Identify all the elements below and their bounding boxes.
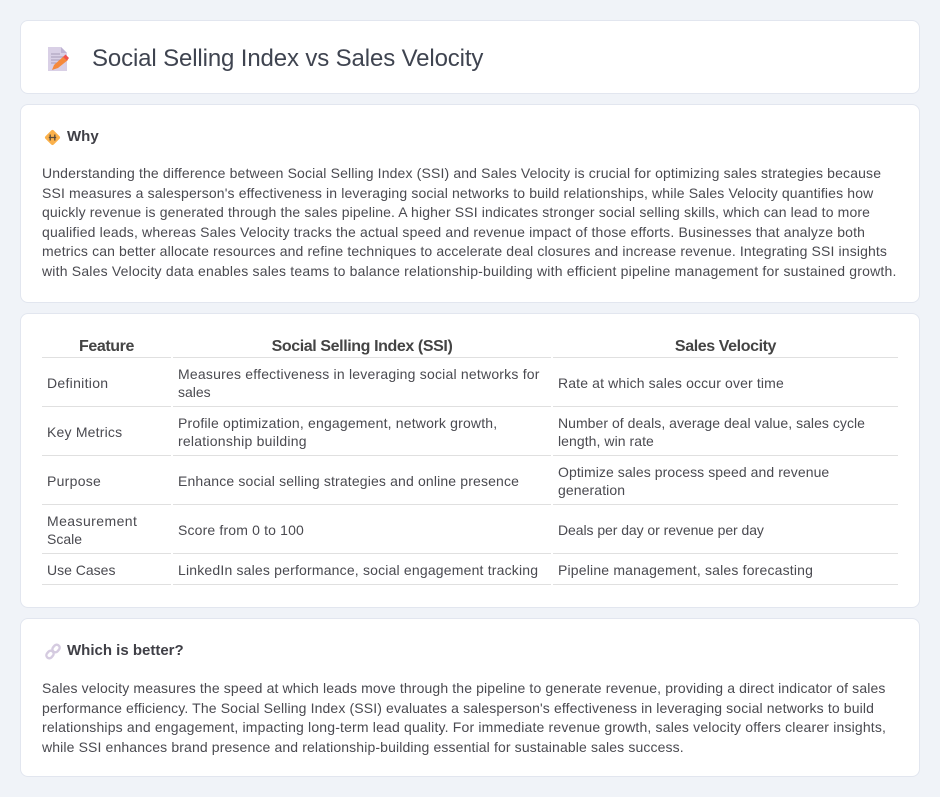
heading: why: Why [67, 128, 99, 145]
row: use cases: LinkedIn sales performance, social engagement tracking [178, 562, 538, 578]
table header: sales velocity: Sales Velocity [675, 338, 776, 355]
text block: why: with Sales Velocity data enables sales teams to balance relationship-building with efficient pipeline management for sustained growth. [42, 263, 897, 279]
text block: why: SSI measures a salesperson's effectiveness in leveraging social networks to build relationships, while Sales Velocity quantifies how [42, 185, 873, 201]
row: key metrics: Number of deals, average deal value, sales cycle [558, 414, 865, 430]
text block: why: metrics can better allocate resources and refine techniques to accelerate deal closures and increase revenue. Integrating SSI insights [42, 243, 887, 259]
row: key metrics: Key Metrics [47, 424, 122, 440]
row: purpose: Optimize sales process speed and revenue [558, 464, 829, 480]
icon: chain link [45, 644, 61, 660]
text block: which is better: performance efficiency. The Social Selling Index (SSI) evaluates a salesperson's effectiveness in leveraging social networks to build [42, 700, 874, 716]
row: definition: sales [178, 384, 211, 400]
text block: why: Understanding the difference between Social Selling Index (SSI) and Sales Velocity is crucial for optimizing sales strategies because [42, 165, 881, 181]
panel: why [20, 104, 920, 303]
table header: feature [42, 337, 171, 358]
row: key metrics: length, win rate [558, 432, 654, 448]
row: key metrics: relationship building [178, 432, 307, 448]
row: measurement scale [42, 512, 898, 554]
row: definition: Measures effectiveness in leveraging social networks for [178, 366, 540, 382]
row: key metrics: Profile optimization, engagement, network growth, [178, 414, 497, 430]
text block: why: quickly revenue is generated through the sales pipeline. A higher SSI indicates stronger social selling skills, which can lead to more [42, 204, 870, 220]
table header: feature: Feature [79, 338, 134, 355]
row: measurement scale: Measurement [47, 512, 137, 528]
row: measurement scale: Scale [47, 530, 82, 546]
row: measurement scale: Score from 0 to 100 [178, 522, 304, 538]
row: purpose: generation [558, 482, 625, 498]
row: definition [42, 366, 898, 407]
panel: comparison table [20, 313, 920, 608]
icon: document with pencil [48, 47, 69, 71]
table header: social selling index: Social Selling Index (SSI) [272, 338, 452, 355]
heading: which is better: Which is better? [67, 642, 184, 659]
table header: social selling index [173, 337, 551, 358]
text block: which is better [42, 680, 886, 755]
row: purpose [42, 464, 898, 505]
icon: warning diamond [44, 130, 60, 146]
panel: which is better [20, 618, 920, 777]
text block: why: qualified leads, whereas Sales Velocity tracks the actual speed and revenue impact of those efforts. Businesses that analyze both [42, 224, 865, 240]
text block: which is better: while SSI enhances brand presence and relationship-building essential for sustainable sales success. [42, 739, 684, 755]
text block: which is better: relationships and engagement, impacting long-term lead quality. For immediate revenue growth, sales velocity offers clearer insights, [42, 719, 886, 735]
row: definition: Rate at which sales occur over time [558, 374, 784, 390]
header panel [20, 20, 920, 94]
title: Social Selling Index vs Sales Velocity [92, 45, 483, 72]
row: use cases: Use Cases [47, 562, 115, 578]
row: use cases: Pipeline management, sales forecasting [558, 562, 813, 578]
row: key metrics [42, 414, 898, 456]
row: purpose: Enhance social selling strategies and online presence [178, 472, 519, 488]
text block: which is better: Sales velocity measures the speed at which leads move through the pipeline to generate revenue, providing a direct indicator of sales [42, 680, 886, 696]
table header: sales velocity [553, 337, 898, 358]
row: definition: Definition [47, 374, 108, 390]
row: purpose: Purpose [47, 472, 101, 488]
row: measurement scale: Deals per day or revenue per day [558, 522, 764, 538]
row: use cases [42, 562, 898, 585]
text block: why [42, 165, 897, 279]
